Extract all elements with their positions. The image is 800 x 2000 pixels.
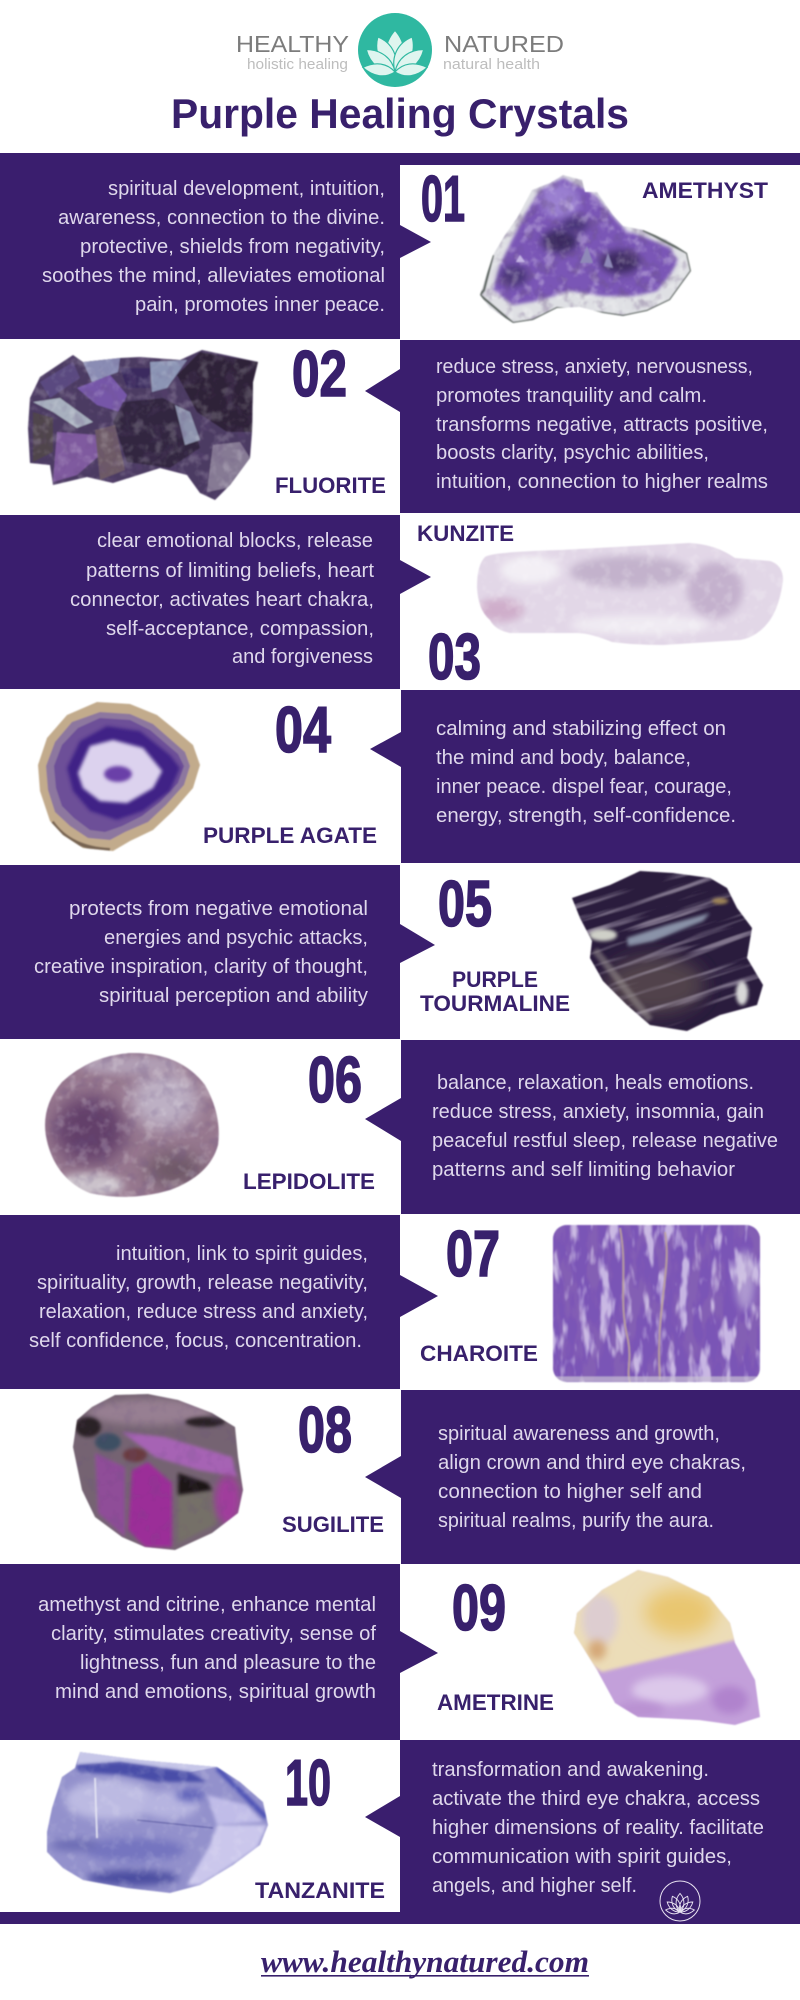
- description text: activate the third eye chakra, access: [432, 1788, 760, 1810]
- crystal name: PURPLE: [452, 967, 538, 992]
- crystal image: sugilite: [68, 1392, 248, 1554]
- description text: amethyst and citrine, enhance mental: [38, 1594, 376, 1616]
- description text: pain, promotes inner peace.: [135, 294, 385, 316]
- description text: self-acceptance, compassion,: [106, 618, 374, 640]
- crystal name: KUNZITE: [417, 521, 514, 546]
- crystal name: TANZANITE: [255, 1878, 385, 1903]
- description text: transforms negative, attracts positive,: [436, 414, 768, 436]
- crystal image: tanzanite: [44, 1748, 272, 1898]
- description panel with arrow: [0, 1740, 800, 1924]
- description text: awareness, connection to the divine.: [58, 207, 385, 229]
- crystal image: charoite: [553, 1225, 760, 1382]
- panel: 03 kunzite: [0, 515, 785, 693]
- panel: 02 fluorite: [26, 337, 800, 513]
- description text: [438, 1423, 746, 1532]
- description text: intuition, connection to higher realms: [436, 471, 768, 493]
- number 06: 06: [308, 1043, 362, 1116]
- number 05: 05: [438, 867, 492, 940]
- description panel with arrow: [370, 690, 800, 863]
- description text: mind and emotions, spiritual growth: [55, 1681, 376, 1703]
- description text: spiritual realms, purify the aura.: [438, 1510, 714, 1532]
- description text: energies and psychic attacks,: [104, 927, 368, 949]
- description text: [29, 1243, 368, 1352]
- description text: communication with spirit guides,: [432, 1846, 732, 1868]
- description text: energy, strength, self-confidence.: [436, 805, 736, 827]
- crystal name: TOURMALINE: [420, 991, 570, 1016]
- description text: peaceful restful sleep, release negative: [432, 1130, 778, 1152]
- description text: spiritual awareness and growth,: [438, 1423, 720, 1445]
- description text: angels, and higher self.: [432, 1875, 637, 1897]
- description text: [34, 898, 368, 1007]
- crystal name: SUGILITE: [282, 1512, 384, 1537]
- icon: teal lotus circle: [358, 13, 432, 87]
- icon: small lotus badge: [660, 1881, 700, 1921]
- description text: higher dimensions of reality. facilitate: [432, 1817, 764, 1839]
- description text: relaxation, reduce stress and anxiety,: [39, 1301, 368, 1323]
- logo: Healthy Natured: [236, 13, 564, 87]
- logo tagline left: holistic healing: [247, 56, 348, 73]
- description text: lightness, fun and pleasure to the: [80, 1652, 376, 1674]
- description text: clear emotional blocks, release: [97, 530, 373, 552]
- description text: spiritual development, intuition,: [108, 178, 385, 200]
- description panel with arrow: [365, 340, 800, 513]
- logo wordmark left: HEALTHY: [236, 31, 349, 57]
- description text: reduce stress, anxiety, insomnia, gain: [432, 1101, 764, 1123]
- crystal name: FLUORITE: [275, 473, 386, 498]
- crystal name: [420, 967, 570, 1016]
- description text: clarity, stimulates creativity, sense of: [51, 1623, 376, 1645]
- description panel with arrow: [365, 1390, 800, 1564]
- description text: protects from negative emotional: [69, 898, 368, 920]
- crystal image: amethyst geode: [478, 172, 694, 326]
- description text: intuition, link to spirit guides,: [116, 1243, 368, 1265]
- panel: 05 purple tourmaline: [0, 816, 800, 1084]
- description text: [432, 1759, 764, 1897]
- description text: connection to higher self and: [438, 1481, 702, 1503]
- panel: 04 purple agate: [35, 690, 800, 863]
- description text: the mind and body, balance,: [436, 747, 691, 769]
- logo wordmark right: NATURED: [444, 31, 564, 57]
- description text: patterns of limiting beliefs, heart: [86, 560, 374, 582]
- panel: 07 charoite: [0, 1215, 760, 1389]
- description text: creative inspiration, clarity of thought,: [34, 956, 368, 978]
- crystal name: AMETRINE: [437, 1690, 554, 1715]
- description text: soothes the mind, alleviates emotional: [42, 265, 385, 287]
- description text: calming and stabilizing effect on: [436, 718, 726, 740]
- description text: reduce stress, anxiety, nervousness,: [436, 356, 753, 378]
- panel: 06 lepidolite: [40, 1040, 800, 1214]
- description text: align crown and third eye chakras,: [438, 1452, 746, 1474]
- description text: [42, 178, 385, 316]
- description text: [70, 530, 374, 668]
- description panel with arrow: [0, 865, 435, 1039]
- number 04: 04: [275, 693, 331, 766]
- number 02: 02: [292, 337, 347, 410]
- crystal image: fluorite cluster: [26, 348, 262, 502]
- logo tagline right: natural health: [443, 56, 540, 73]
- footer website link: www.healthynatured.com: [261, 1944, 589, 1979]
- number 01: 01: [421, 162, 465, 235]
- number 03: 03: [428, 620, 481, 693]
- title: Purple Healing Crystals: [171, 90, 629, 137]
- panel: 08 sugilite: [68, 1390, 800, 1564]
- panel: 09 ametrine: [0, 1564, 763, 1740]
- description panel with arrow: [0, 515, 431, 689]
- crystal image: lepidolite: [40, 1050, 222, 1202]
- description text: patterns and self limiting behavior: [432, 1159, 735, 1181]
- description text: spirituality, growth, release negativity,: [37, 1272, 368, 1294]
- number 08: 08: [298, 1393, 352, 1466]
- crystal name: LEPIDOLITE: [243, 1169, 375, 1194]
- description text: [436, 356, 768, 493]
- number 10: 10: [285, 1746, 331, 1819]
- description text: spiritual perception and ability: [99, 985, 368, 1007]
- crystal name: PURPLE AGATE: [203, 823, 377, 848]
- crystal image: ametrine: [568, 1568, 763, 1728]
- number 09: 09: [452, 1571, 506, 1644]
- panel: 01 amethyst: [0, 153, 800, 339]
- description text: transformation and awakening.: [432, 1759, 709, 1781]
- crystal image: kunzite: [475, 541, 785, 647]
- description text: inner peace. dispel fear, courage,: [436, 776, 732, 798]
- description text: protective, shields from negativity,: [80, 236, 385, 258]
- description text: connector, activates heart chakra,: [70, 589, 374, 611]
- description text: [38, 1594, 376, 1703]
- description panel with arrow: [0, 1564, 438, 1740]
- description text: balance, relaxation, heals emotions.: [437, 1072, 754, 1094]
- description text: [432, 1072, 778, 1181]
- description panel with arrow: [0, 153, 800, 339]
- description text: promotes tranquility and calm.: [436, 385, 707, 407]
- description text: boosts clarity, psychic abilities,: [436, 442, 709, 464]
- crystal image: tourmaline: [571, 870, 764, 1032]
- description text: [436, 718, 736, 827]
- description panel with arrow: [365, 1040, 800, 1214]
- description text: self confidence, focus, concentration.: [29, 1330, 362, 1352]
- crystal image: agate slice: [35, 700, 205, 855]
- panel: 10 tanzanite: [0, 1740, 800, 1924]
- number 07: 07: [446, 1217, 500, 1290]
- crystal name: CHAROITE: [420, 1341, 538, 1366]
- description text: and forgiveness: [232, 646, 373, 668]
- description panel with arrow: [0, 1215, 438, 1389]
- crystal name: AMETHYST: [642, 178, 769, 203]
